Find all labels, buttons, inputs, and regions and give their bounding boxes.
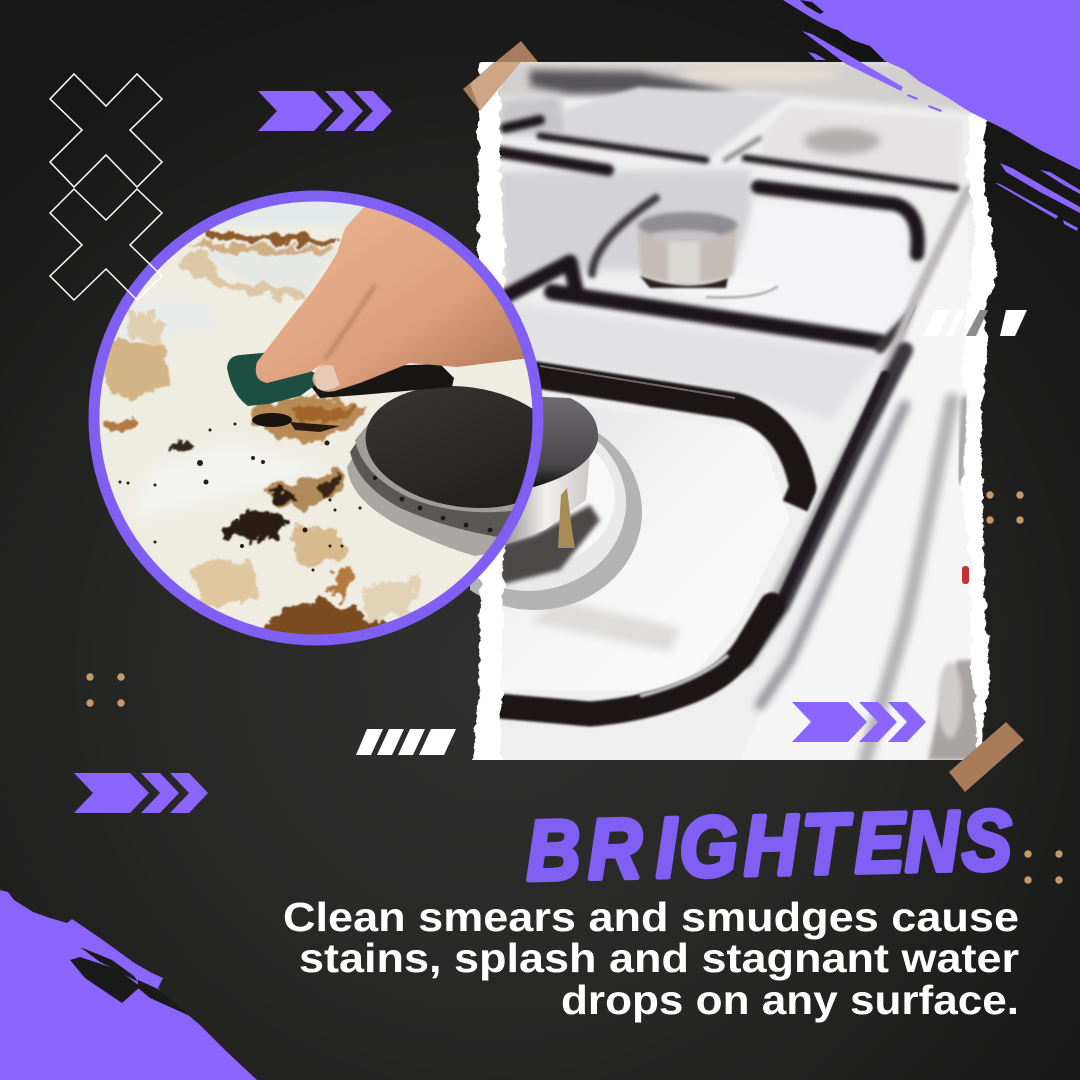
chevron arrows top bbox=[258, 91, 392, 131]
dots near heading bbox=[1024, 850, 1063, 884]
back grates bbox=[500, 120, 956, 348]
burner port holes bbox=[373, 476, 492, 532]
body text: drops on any surface. bbox=[561, 977, 1019, 1023]
right rail bbox=[740, 188, 980, 760]
body text: Clean smears and smudges cause bbox=[283, 894, 1019, 940]
torn paper frame bbox=[472, 40, 998, 780]
body text: stains, splash and stagnant water bbox=[299, 935, 1019, 981]
body text bbox=[283, 894, 1019, 1023]
tape: top bbox=[463, 41, 538, 111]
thumbnail and finger shadow bbox=[314, 285, 375, 390]
stripes right of photo bbox=[923, 310, 1027, 336]
photo: gas stove bbox=[428, 62, 980, 760]
icon: white outlined X shapes bbox=[50, 74, 162, 300]
front burner bbox=[470, 396, 642, 610]
torn paper: right strip bbox=[961, 100, 998, 780]
torn paper: left strip bbox=[472, 40, 505, 780]
dots right of photo bbox=[986, 491, 1024, 524]
pale top surface bbox=[222, 202, 364, 224]
top burner bbox=[637, 212, 778, 299]
stripes lower left bbox=[356, 729, 456, 755]
chevron arrows lower left bbox=[74, 773, 208, 813]
burner base ring bbox=[347, 458, 497, 556]
tape: bottom right bbox=[949, 722, 1024, 792]
dots left bbox=[86, 673, 125, 707]
circle outline bbox=[94, 196, 538, 640]
heading: BRIGHTENS bbox=[525, 793, 1013, 898]
brush stroke: top right bbox=[783, 0, 1080, 231]
sponge bbox=[227, 352, 454, 406]
front grates bbox=[498, 374, 803, 714]
circular inset photo: dirty burner bbox=[100, 202, 532, 634]
burner cap bbox=[366, 386, 532, 508]
rust stains bbox=[100, 230, 420, 640]
specks bbox=[118, 422, 362, 572]
brush stroke: bottom left bbox=[0, 890, 257, 1080]
chevron arrows on photo bbox=[792, 702, 926, 742]
hand bbox=[256, 207, 524, 392]
